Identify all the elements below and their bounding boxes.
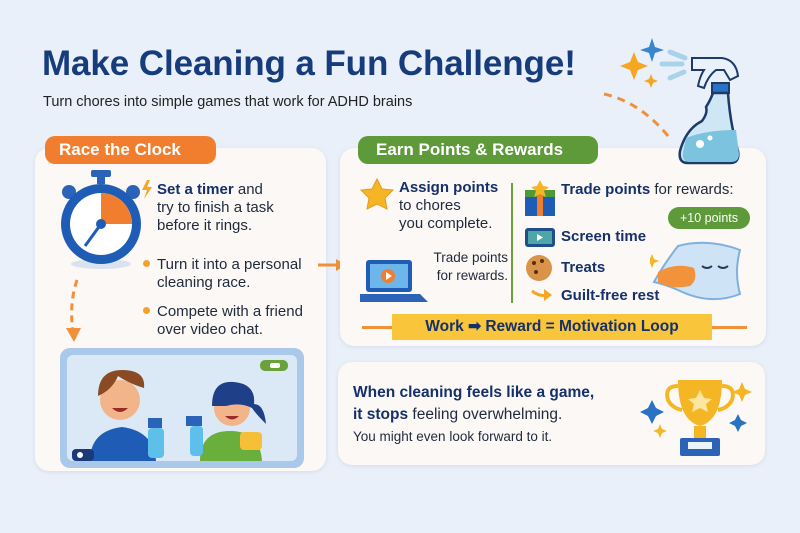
icon: trophy xyxy=(640,380,752,456)
text: set a timer: try to finish a task xyxy=(157,199,274,216)
tab: race the clock xyxy=(45,136,216,164)
text: set a timer: before it rings. xyxy=(157,217,252,234)
reward: guilt-free rest: Guilt-free rest xyxy=(561,287,659,304)
text: assign points: you complete. xyxy=(399,215,492,232)
text: assign points: to chores xyxy=(399,197,461,214)
icon: spray bottle with sparkles xyxy=(604,38,740,164)
illustration: video chat xyxy=(60,348,304,468)
badge: +10 points: +10 points xyxy=(680,211,738,225)
banner: motivation loop: Work ➡ Reward = Motivation Loop xyxy=(425,318,679,335)
tab: earn points xyxy=(358,136,598,164)
text: look forward: You might even look forward to it. xyxy=(353,429,552,444)
text: assign points xyxy=(399,179,498,232)
bullet: compete with friend xyxy=(143,303,303,338)
text: trade points: Trade points xyxy=(433,250,508,265)
text: conclusion: When cleaning feels like a game, xyxy=(353,384,594,401)
reward: treats: Treats xyxy=(561,259,605,276)
arrow: orange connector xyxy=(318,259,340,271)
bullet: personal race: cleaning race. xyxy=(157,274,250,291)
reward: screen time xyxy=(525,228,646,247)
panel: race the clock xyxy=(35,148,326,471)
text: conclusion xyxy=(353,384,594,423)
tab: race the clock: Race the Clock xyxy=(59,140,181,159)
text: set a timer xyxy=(157,181,274,234)
panel: conclusion xyxy=(338,362,765,465)
title: Make Cleaning a Fun Challenge! xyxy=(42,44,576,83)
text: trade points: for rewards. xyxy=(437,268,508,283)
text: assign points: Assign points xyxy=(399,179,498,196)
text: conclusion: it stops feeling overwhelming. xyxy=(353,406,562,423)
badge: +10 points xyxy=(668,207,750,229)
bullet: personal race xyxy=(143,256,302,291)
text: trade points xyxy=(433,250,508,283)
text: trade for rewards: Trade points for rewards: xyxy=(561,181,734,198)
icon: gift xyxy=(525,180,555,216)
reward: treats xyxy=(526,255,605,281)
text: set a timer: Set a timer and xyxy=(157,181,263,198)
icon: star xyxy=(360,178,394,210)
arrow: dashed down xyxy=(66,280,81,342)
icon: laptop xyxy=(360,260,428,302)
divider xyxy=(511,183,513,303)
banner: motivation loop xyxy=(362,314,747,340)
bullet: compete with friend: over video chat. xyxy=(157,321,263,338)
icon: pillow xyxy=(650,242,742,300)
bullet: personal race: Turn it into a personal xyxy=(157,256,302,273)
reward: screen time: Screen time xyxy=(561,228,646,245)
panel: earn points xyxy=(340,148,766,346)
subtitle: Turn chores into simple games that work for ADHD brains xyxy=(43,94,412,110)
icon: stopwatch xyxy=(61,170,152,269)
tab: earn points: Earn Points & Rewards xyxy=(376,140,563,159)
bullet: compete with friend: Compete with a friend xyxy=(157,303,303,320)
